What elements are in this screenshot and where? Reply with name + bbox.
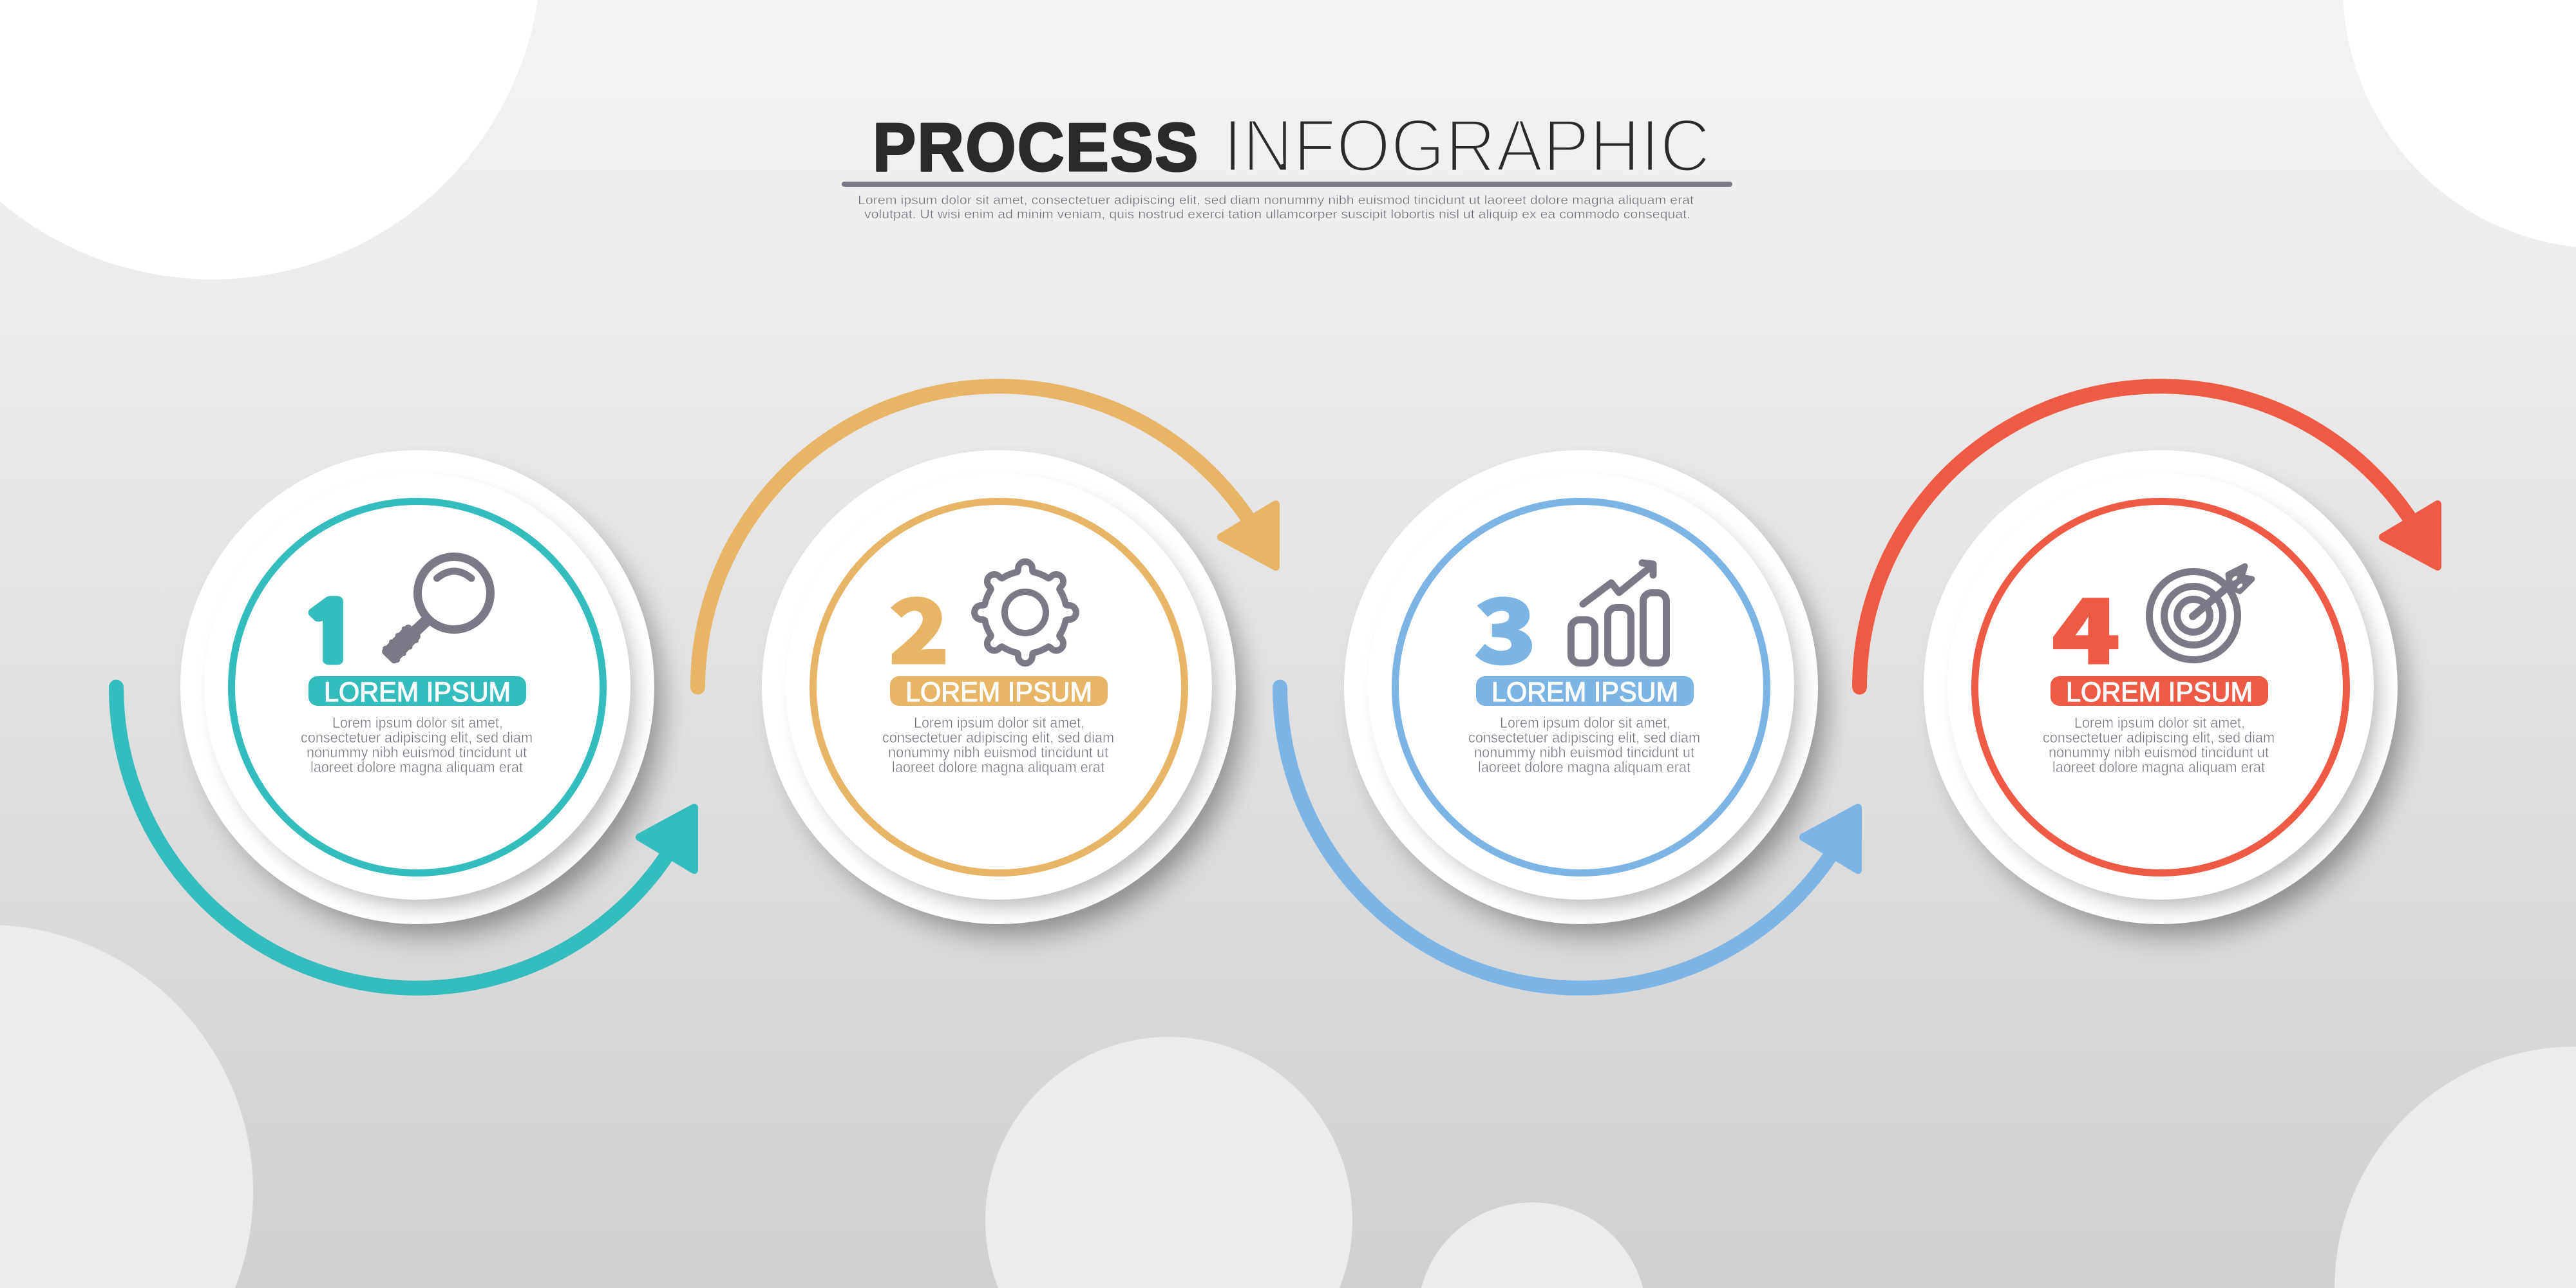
text: step 1: consectetuer adipiscing elit, sed diam (301, 729, 533, 746)
panel: step 3 disc (1344, 450, 1826, 936)
panel: step 4 disc (1924, 450, 2405, 936)
text: step 2: laoreet dolore magna aliquam erat (892, 759, 1105, 775)
text: step 4: nonummy nibh euismod tincidunt ut (2049, 744, 2269, 761)
panel: step 1 disc (180, 450, 662, 936)
text: step 2: consectetuer adipiscing elit, sed diam (882, 729, 1114, 746)
icon: bar chart with rising arrow (1571, 563, 1667, 663)
text: step 3: consectetuer adipiscing elit, sed diam (1468, 729, 1700, 746)
panel: step 2 disc (762, 450, 1244, 936)
text: step 2: Lorem ipsum dolor sit amet, (914, 714, 1084, 731)
title: INFOGRAPHIC (1223, 104, 1710, 187)
title rule (842, 182, 1732, 187)
text: step 4: Lorem ipsum dolor sit amet, (2074, 714, 2245, 731)
label: step 3: LOREM IPSUM (1492, 677, 1678, 708)
text: step 1 (301, 714, 533, 775)
text: step 1: nonummy nibh euismod tincidunt ut (307, 744, 527, 761)
subtitle text: volutpat. Ut wisi enim ad minim veniam, quis nostrud exerci tation ullamcorper suscipit lobortis nisl ut aliquip ex ea commodo consequat. (864, 208, 1690, 222)
text: step 4: laoreet dolore magna aliquam erat (2052, 759, 2266, 775)
icon: target with arrow (2150, 566, 2252, 659)
text: step 3: Lorem ipsum dolor sit amet, (1500, 714, 1671, 731)
text: step 3: laoreet dolore magna aliquam erat (1478, 759, 1691, 775)
label: step 2: LOREM IPSUM (905, 677, 1092, 708)
number 1: 1 (300, 593, 361, 673)
text: step 4 (2043, 714, 2275, 775)
text: step 2: nonummy nibh euismod tincidunt ut (888, 744, 1109, 761)
label: step 4: LOREM IPSUM (2066, 677, 2253, 708)
number 4: 4 (2052, 560, 2120, 689)
text: step 3: nonummy nibh euismod tincidunt ut (1474, 744, 1695, 761)
icon: gear (974, 562, 1076, 663)
title (873, 104, 1710, 187)
number 2: 2 (889, 560, 949, 689)
arrow: step 2 to 3 (698, 386, 1276, 687)
text: step 1: Lorem ipsum dolor sit amet, (332, 714, 503, 731)
text: step 3 (1468, 714, 1700, 775)
text: step 4: consectetuer adipiscing elit, sed diam (2043, 729, 2275, 746)
arrow: step 3 to 4 (1280, 687, 1858, 988)
icon: magnifying glass (379, 556, 491, 666)
subtitle text: Lorem ipsum dolor sit amet, consectetuer adipiscing elit, sed diam nonummy nibh euismod tincidunt ut laoreet dolore magna aliquam erat (858, 194, 1694, 207)
number 3: 3 (1474, 560, 1537, 689)
subtitle text (858, 194, 1694, 222)
title: PROCESS (873, 109, 1198, 185)
text: step 2 (882, 714, 1114, 775)
label: step 1: LOREM IPSUM (324, 677, 511, 708)
arrow: step 4 out (1860, 386, 2438, 687)
arrow: step 1 to 2 (116, 687, 694, 988)
text: step 1: laoreet dolore magna aliquam erat (310, 759, 524, 775)
